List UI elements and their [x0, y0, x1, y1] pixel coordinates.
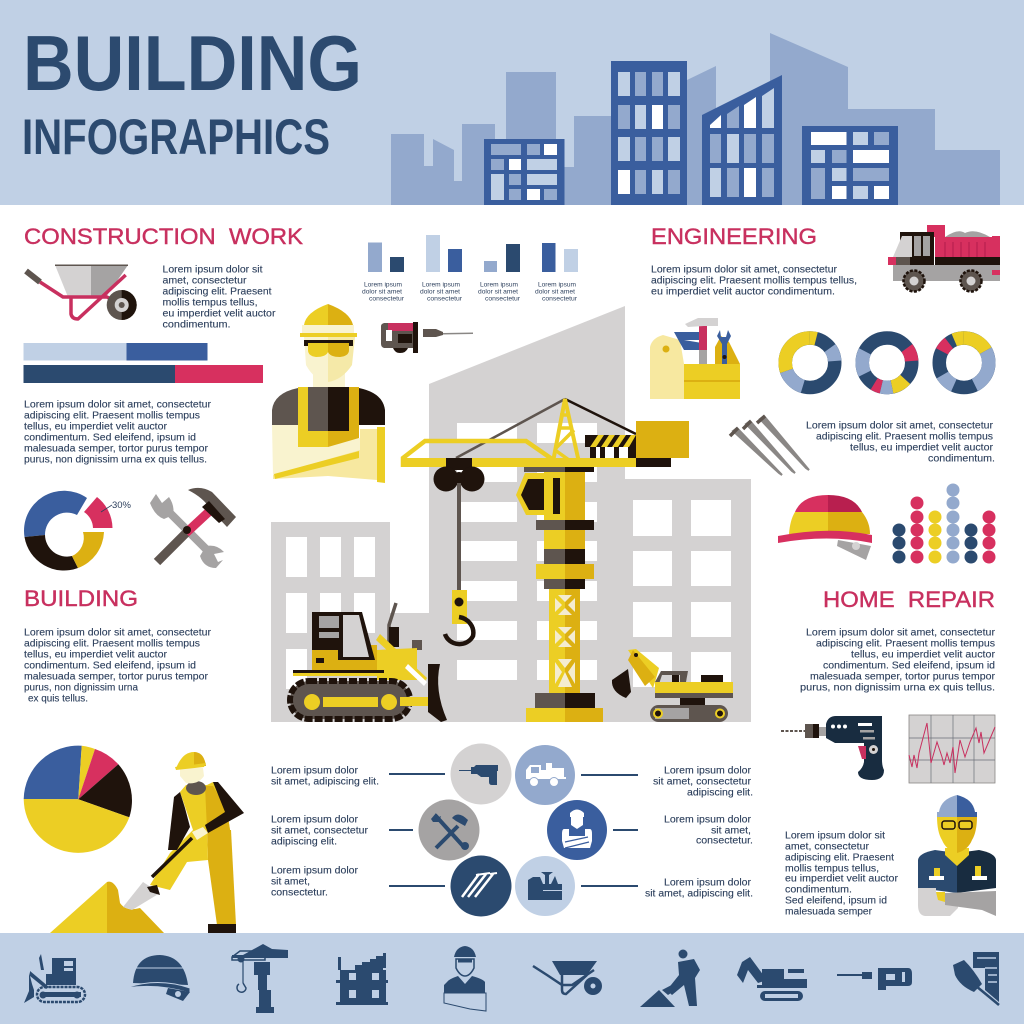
scene: excavator [612, 649, 733, 722]
bar chart labels: dolor sit amet [420, 288, 460, 296]
building front 2 [611, 61, 687, 205]
bar chart labels: dolor sit amet [362, 288, 402, 296]
circle: tools [418, 800, 480, 860]
text block: home repair: condimentum. Sed eleifend, ipsum id [823, 660, 995, 672]
sand pile [50, 882, 164, 933]
icon: hammer and wrench [150, 488, 236, 568]
text block: wheelbarrow: condimentum. [162, 318, 230, 330]
callout labels right: consectetur. [696, 834, 753, 846]
text block: engineering: Lorem ipsum dolor sit amet, consectetur [651, 264, 837, 276]
callout labels left: sit amet, consectetur [271, 824, 369, 836]
footer icons [24, 944, 999, 1013]
text block: engineering right: tellus, eu imperdiet velit auctor [850, 442, 993, 454]
text block: wheelbarrow: eu imperdiet velit auctor [162, 308, 276, 320]
text block: building: purus, non dignissim urna [24, 682, 138, 694]
bar chart labels: consectetur [542, 296, 578, 302]
scene: bulldozer [290, 603, 447, 722]
building front 4 [802, 126, 898, 205]
footer band [0, 933, 1024, 1024]
callout labels right: Lorem ipsum dolor [664, 764, 752, 776]
text block: engineer: condimentum. [785, 884, 852, 896]
text block: construction: purus, non dignissim urna ex quis tellus. [24, 454, 207, 466]
stacked bars [24, 343, 263, 383]
line chart [909, 715, 995, 783]
text block: wheelbarrow: amet, consectetur [162, 274, 247, 286]
text block: building: adipiscing elit. Praesent mollis tempus [24, 638, 200, 650]
bar chart labels [362, 282, 578, 302]
text block: engineering right [806, 420, 995, 464]
text block: home repair: adipiscing elit. Praesent mollis tempus [816, 638, 995, 650]
skyline [391, 33, 1000, 205]
worker body [272, 387, 385, 483]
footer icon: building [336, 953, 388, 1005]
circle: worker [547, 800, 607, 860]
text block: building: condimentum. Sed eleifend, ipsum id [24, 660, 196, 672]
text block: construction: Lorem ipsum dolor sit amet, consectetur [24, 398, 211, 410]
heading: home repair: HOME REPAIR [823, 587, 995, 612]
heading: building: BUILDING [24, 586, 138, 611]
text block: engineer: amet, consectetur [785, 840, 869, 852]
circle: truck [515, 745, 575, 805]
text block: wheelbarrow [162, 264, 276, 330]
header band [0, 0, 1024, 205]
text block: construction: adipiscing elit. Praesent mollis tempus [24, 410, 200, 422]
donut chart 30% [24, 491, 132, 571]
worker with hard hat [272, 304, 385, 483]
text block: engineer: malesuada semper [785, 906, 872, 918]
donut 1 [785, 338, 835, 387]
callout labels left: sit amet, adipiscing elit. [271, 776, 379, 788]
heading: construction work: CONSTRUCTION WORK [24, 224, 303, 249]
bar chart labels: dolor sit amet [478, 288, 518, 296]
engineer figure [918, 795, 996, 916]
background buildings [391, 33, 1000, 205]
text block: engineer: adipiscing elit. Praesent [785, 852, 894, 864]
footer icon: trowel and building [953, 952, 999, 1005]
text block: engineering [651, 264, 857, 298]
text block: wheelbarrow: Lorem ipsum dolor sit [162, 264, 263, 276]
callout labels right [645, 764, 753, 900]
donut 3 [939, 338, 989, 387]
text block: home repair: Lorem ipsum dolor sit amet, consectetur [806, 626, 996, 638]
text block: engineer: Lorem ipsum dolor sit [785, 830, 885, 842]
bar chart labels: consectetur [485, 296, 521, 302]
digging worker [50, 752, 244, 933]
callout labels right: sit amet, [711, 824, 751, 836]
callout labels right: Lorem ipsum dolor [664, 876, 752, 888]
icon: red hard hat [778, 495, 872, 560]
circle: toolbox [515, 856, 575, 916]
callout labels left: sit amet, [271, 876, 310, 888]
worker head [300, 304, 357, 387]
text block: engineering right: Lorem ipsum dolor sit amet, consectetur [806, 420, 993, 432]
icon: toolbox [650, 318, 740, 399]
text block: building: Lorem ipsum dolor sit amet, consectetur [24, 626, 211, 638]
icon: jackhammer [381, 322, 473, 353]
footer icon: bulldozer [24, 954, 85, 1003]
dot column chart [892, 484, 996, 564]
text block: building: tellus, eu imperdiet velit auctor [24, 648, 167, 660]
text block: building: ex quis tellus. [28, 692, 88, 704]
building front 1 [484, 139, 564, 205]
footer icon: helmet [125, 955, 190, 1001]
text block: building: malesuada semper, tortor purus tempor [24, 670, 208, 682]
text block: engineering: adipiscing elit. Praesent mollis tempus tellus, [651, 274, 857, 286]
text block: wheelbarrow: adipiscing elit. Praesent [162, 286, 272, 298]
text block: engineer: Sed eleifend, ipsum id [785, 894, 887, 906]
bar chart labels: Lorem ipsum [538, 282, 576, 288]
pie chart [24, 746, 132, 853]
footer icon: crane [232, 944, 288, 1013]
callout labels left: Lorem ipsum dolor [271, 814, 359, 826]
icon: nails [730, 416, 809, 475]
text block: construction: tellus, eu imperdiet velit auctor [24, 420, 167, 432]
bar chart labels: Lorem ipsum [480, 282, 518, 288]
shovel blade [123, 882, 160, 910]
title [22, 19, 362, 165]
bar charts [362, 235, 578, 302]
callout labels right: sit amet, adipiscing elit. [645, 888, 753, 900]
title: BUILDING [23, 19, 362, 107]
callout labels left [271, 764, 379, 898]
text block: engineer: mollis tempus tellus, [785, 862, 879, 874]
text block: wheelbarrow: mollis tempus tellus, [162, 296, 258, 308]
bar chart labels: Lorem ipsum [364, 282, 402, 288]
bar chart labels: Lorem ipsum [422, 282, 460, 288]
callout labels right: adipiscing elit. [687, 786, 753, 798]
callout labels left: adipiscing elit. [271, 836, 337, 848]
text block: engineering: eu imperdiet velit auctor condimentum. [651, 286, 835, 298]
scene: tower crane [403, 399, 689, 722]
footer icon: wheelbarrow [533, 961, 602, 995]
donut 2 [862, 338, 912, 387]
callout labels left: consectetur. [271, 886, 328, 898]
text block: home repair [800, 626, 996, 694]
text block: building [24, 626, 211, 704]
footer icon: excavator [737, 957, 807, 1001]
text block: construction: malesuada semper, tortor purus tempor [24, 442, 208, 454]
title: INFOGRAPHICS [22, 109, 330, 165]
text block: engineer: eu imperdiet velit auctor [785, 872, 898, 884]
bar chart labels: consectetur [369, 296, 405, 302]
text block: home repair: purus, non dignissim urna ex quis tellus. [800, 682, 995, 694]
building front 3 [702, 75, 782, 205]
text block: construction [24, 398, 211, 466]
heading: engineering: ENGINEERING [651, 224, 817, 249]
text block: engineer [785, 830, 898, 918]
callout labels left: Lorem ipsum dolor [271, 764, 359, 776]
bar chart labels: consectetur [427, 296, 463, 302]
scene: grey buildings [271, 306, 751, 722]
callout labels right: sit amet, consectetur [653, 776, 752, 788]
text block: engineering right: adipiscing elit. Praesent mollis tempus [816, 430, 993, 442]
circle: nails [450, 856, 512, 916]
icon: wheelbarrow [26, 264, 137, 320]
text block: construction: condimentum. Sed eleifend, ipsum id [24, 432, 196, 444]
figure [147, 752, 244, 933]
footer icon: jackhammer [837, 968, 912, 990]
text block: home repair: tellus, eu imperdiet velit auctor [851, 648, 995, 660]
text block: engineering right: condimentum. [928, 452, 995, 464]
text block: home repair: malesuada semper, tortor purus tempor [810, 670, 995, 682]
donut chart 30%: 30% [112, 500, 132, 511]
bar chart labels: dolor sit amet [535, 288, 575, 296]
callout labels left: Lorem ipsum dolor [271, 864, 359, 876]
icon: dump truck [888, 225, 1000, 292]
footer icon: worker [444, 946, 486, 1011]
footer icon: digger [640, 950, 700, 1007]
callout labels right: Lorem ipsum dolor [664, 814, 752, 826]
circle: drill [450, 744, 512, 804]
icon: drill [781, 716, 884, 780]
connector lines [389, 774, 638, 886]
